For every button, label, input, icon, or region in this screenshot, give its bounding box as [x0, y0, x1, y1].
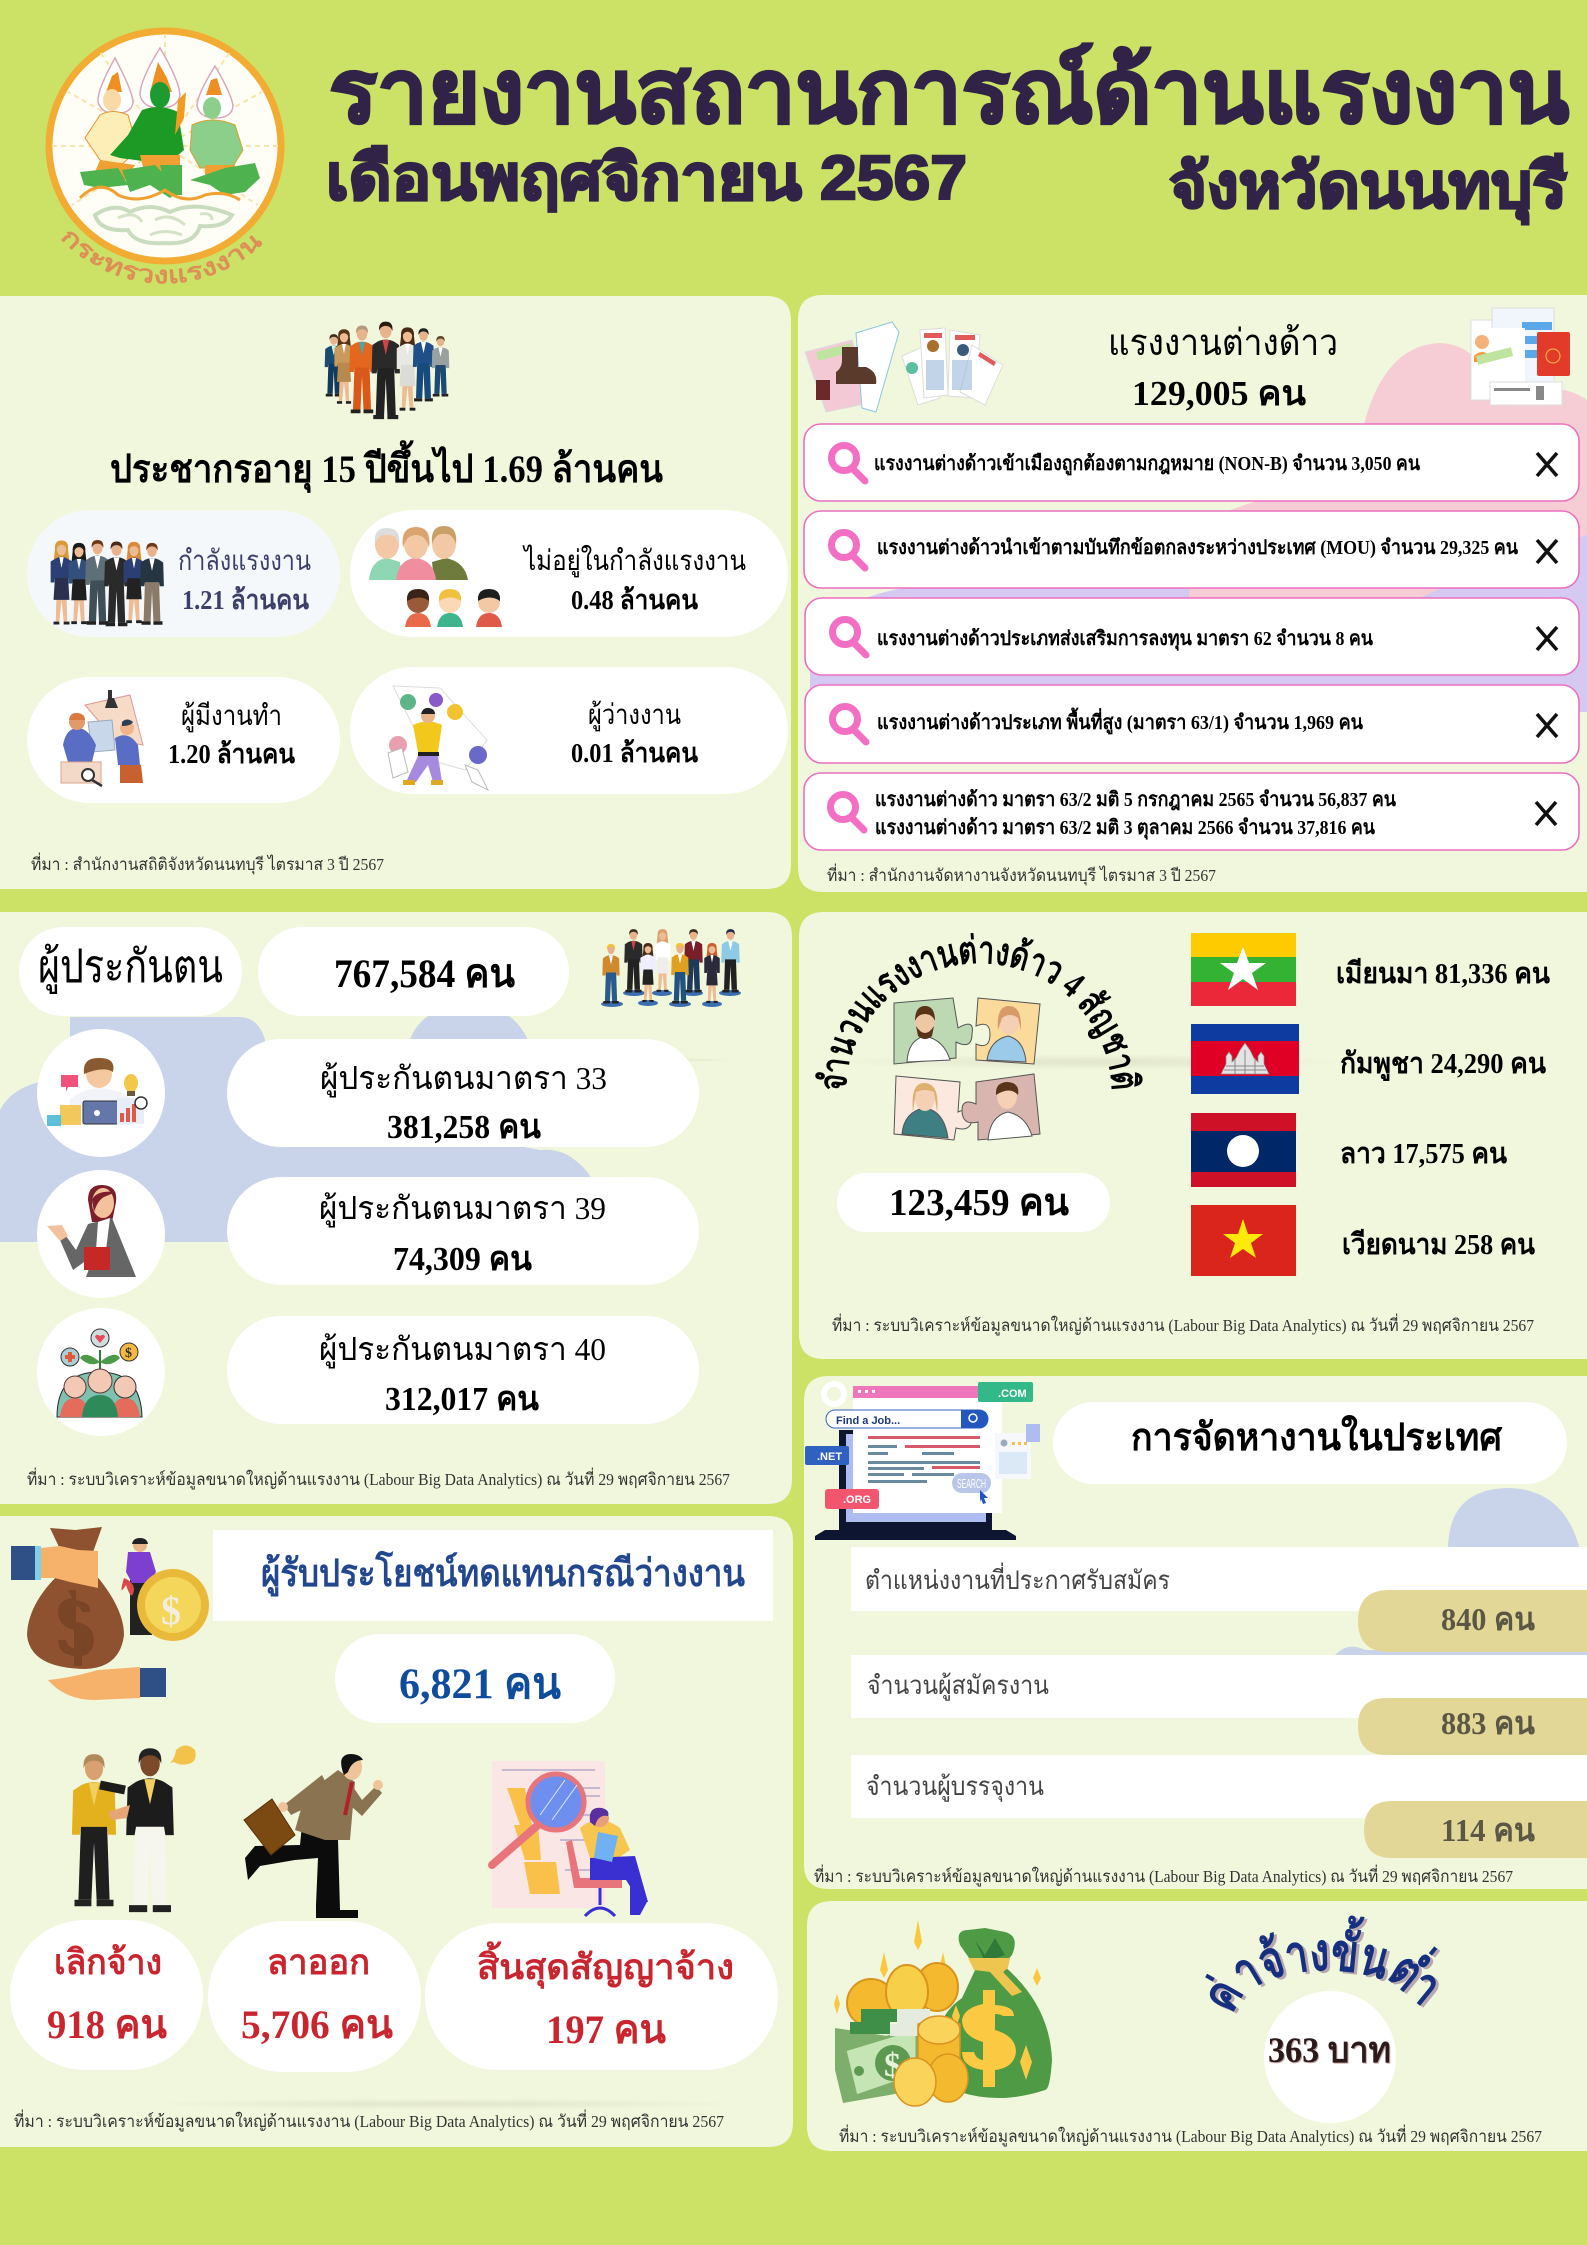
label: ผู้ประกันตนมาตรา 39 [319, 1190, 606, 1228]
text: แรงงานต่างด้าวประเภท พื้นที่สูง (มาตรา 63/1) จำนวน 1,969 คน [877, 707, 1363, 736]
icon: green money bag and coins: $ [884, 2047, 901, 2084]
heading box [213, 1530, 773, 1621]
label: Cambodia: กัมพูชา 24,290 คน [1340, 1048, 1546, 1081]
label: ไม่อยู่ในกำลังแรงงาน [522, 544, 746, 578]
row: vacancies: ตำแหน่งงานที่ประกาศรับสมัคร [865, 1562, 1170, 1595]
card: labour force [27, 510, 340, 637]
row: MOU [804, 511, 1579, 588]
source note: ที่มา : สำนักงานจัดหางานจังหวัดนนทบุรี ไตรมาส 3 ปี 2567 [827, 863, 1216, 886]
pill: heading [19, 927, 242, 1016]
subtitle province: จังหวัดนนทบุรี [1169, 152, 1567, 224]
icon: social security group [37, 1308, 165, 1436]
text line 1: แรงงานต่างด้าว มาตรา 63/2 มติ 5 กรกฎาคม 2565 จำนวน 56,837 คน [875, 788, 1396, 811]
value: 1.21 ล้านคน [182, 585, 309, 615]
value: 381,258 คน [387, 1109, 541, 1146]
card: resigned: ลาออก [267, 1943, 370, 1982]
icon: magnifier [832, 532, 865, 568]
row: section 40 [37, 1308, 699, 1436]
person with coin: $ [161, 1588, 181, 1633]
icon: seniors and children [369, 526, 502, 627]
pill: heading: การจัดหางานในประเทศ [1131, 1415, 1503, 1459]
value circle [1264, 1991, 1396, 2123]
row: applicants [851, 1655, 1587, 1755]
text: แรงงานต่างด้าวนำเข้าตามบันทึกข้อตกลงระหว่างประเทศ (MOU) จำนวน 29,325 คน [877, 536, 1518, 559]
heading: ประชากรอายุ 15 ปีขึ้นไป 1.69 ล้านคน [110, 440, 663, 493]
row: vacancies [851, 1547, 1587, 1652]
icon: approved documents and stamp [805, 322, 1003, 412]
value circle: 363 บาท [1268, 2030, 1391, 2070]
row: section 39 [37, 1170, 699, 1298]
text: แรงงานต่างด้าวเข้าเมืองถูกต้องตามกฎหมาย (NON-B) จำนวน 3,050 คน [874, 452, 1420, 477]
card: terminated: เลิกจ้าง [54, 1943, 162, 1982]
value: 74,309 คน [393, 1241, 532, 1278]
row: vacancies: 840 คน [1441, 1601, 1535, 1637]
icon: labour force people [51, 540, 164, 626]
source note: ที่มา : สำนักงานสถิติจังหวัดนนทบุรี ไตรมาส 3 ปี 2567 [31, 852, 384, 875]
pill: heading: ผู้ประกันตน [38, 941, 223, 994]
row: placements: จำนวนผู้บรรจุงาน [866, 1772, 1044, 1802]
icon: running man [244, 1754, 383, 1918]
pill: total [837, 1173, 1110, 1232]
icon: magnifier [832, 620, 866, 655]
icon: magnifier [832, 446, 865, 481]
pill: heading [1053, 1402, 1567, 1484]
icon: magnifier [830, 794, 864, 830]
arched heading: จำนวนแรงงานต่างด้าว 4 สัญชาติ [815, 933, 1143, 1090]
icon: group of workers [325, 322, 449, 419]
icon: social security group: $ [125, 1346, 132, 1361]
source note: ที่มา : ระบบวิเคราะห์ข้อมูลขนาดใหญ่ด้านแรงงาน (Labour Big Data Analytics) ณ วันที่ 29 พฤศจิกายน 2567 [839, 2124, 1542, 2147]
value: 312,017 คน [385, 1381, 539, 1418]
icon: job seeker with resumes [388, 686, 488, 790]
label: ผู้ประกันตนมาตรา 33 [320, 1060, 607, 1098]
icon: office worker [37, 1029, 165, 1157]
row: highland [805, 685, 1579, 763]
pill: total: 123,459 คน [889, 1182, 1069, 1224]
flag: Cambodia [1191, 1024, 1299, 1094]
row: NON-B [804, 424, 1579, 501]
card: unemployed [350, 667, 788, 794]
icon: job search laptop [805, 1382, 1040, 1540]
panel: domestic job placement [804, 1376, 1587, 1889]
panel: foreign workers [798, 295, 1587, 892]
row: Section 63/2 [804, 773, 1579, 850]
icon: job search laptop: SEARCH [957, 1476, 986, 1491]
row: placements: 114 คน [1441, 1812, 1535, 1848]
pill [227, 1316, 699, 1424]
card: contract ended: 197 คน [546, 2007, 666, 2052]
card: terminated [10, 1920, 203, 2070]
source note: ที่มา : ระบบวิเคราะห์ข้อมูลขนาดใหญ่ด้านแรงงาน (Labour Big Data Analytics) ณ วันที่ 29 พฤศจิกายน 2567 [14, 2109, 724, 2132]
pill [227, 1039, 699, 1147]
icon: close [1537, 714, 1557, 737]
label: ผู้มีงานทำ [181, 700, 282, 733]
icon: analyst with magnifier [492, 1761, 648, 1916]
arched heading: ค่าจ้างขั้นต่ำ [1205, 1916, 1440, 2014]
icon: job search laptop: .ORG [843, 1494, 871, 1506]
subtitle month: เดือนพฤศจิกายน 2567 [326, 144, 967, 213]
card: terminated: 918 คน [47, 2002, 167, 2047]
icon: puzzle people [894, 998, 1040, 1140]
pill: total [335, 1634, 615, 1723]
icon: close [1537, 540, 1557, 563]
panel: unemployment benefits [0, 1516, 793, 2147]
panel: population 15+ [0, 296, 791, 889]
icon: visa and passport [1471, 308, 1570, 405]
title: แรงงานต่างด้าว [1108, 323, 1338, 364]
icon: workers with stamp [61, 690, 143, 786]
icon: money bag with hands [11, 1527, 209, 1700]
value: 0.48 ล้านคน [571, 585, 698, 615]
label: กำลังแรงงาน [178, 546, 311, 577]
icon: magnifier [832, 706, 866, 742]
row: placements [851, 1755, 1587, 1858]
icon: handshake [72, 1746, 196, 1912]
header [46, 28, 1570, 284]
label: Myanmar: เมียนมา 81,336 คน [1336, 958, 1550, 990]
flag: Myanmar [1191, 933, 1296, 1006]
row: applicants: 883 คน [1441, 1705, 1535, 1741]
row: section 33 [37, 1029, 699, 1157]
icon: close [1537, 627, 1557, 650]
icon: close [1536, 802, 1556, 825]
source note: ที่มา : ระบบวิเคราะห์ข้อมูลขนาดใหญ่ด้านแรงงาน (Labour Big Data Analytics) ณ วันที่ 29 พฤศจิกายน 2567 [27, 1467, 730, 1490]
label: Laos: ลาว 17,575 คน [1340, 1138, 1507, 1170]
card: employed [27, 677, 340, 803]
panel: insured persons [0, 912, 792, 1504]
text: แรงงานต่างด้าวประเภทส่งเสริมการลงทุน มาตรา 62 จำนวน 8 คน [877, 627, 1373, 651]
label: Vietnam: เวียดนาม 258 คน [1342, 1229, 1535, 1261]
total: 129,005 คน [1132, 374, 1306, 413]
value: 1.20 ล้านคน [168, 739, 295, 769]
label: ผู้ประกันตนมาตรา 40 [319, 1331, 606, 1369]
panel: four nationalities [799, 912, 1587, 1359]
flag: Vietnam [1191, 1205, 1296, 1276]
value: 0.01 ล้านคน [571, 738, 698, 768]
row: applicants: จำนวนผู้สมัครงาน [867, 1671, 1049, 1701]
pill: total [258, 927, 569, 1016]
icon: businesswoman [37, 1170, 165, 1298]
icon: close [1537, 453, 1557, 476]
card: outside labour force [350, 510, 788, 637]
logo caption: กระทรวงแรงงาน [61, 232, 262, 284]
pill: total: 767,584 คน [334, 951, 515, 996]
panel: minimum wage [807, 1901, 1587, 2151]
person with coin [121, 1538, 209, 1641]
icon: job search laptop: .NET [817, 1451, 842, 1463]
source note: ที่มา : ระบบวิเคราะห์ข้อมูลขนาดใหญ่ด้านแรงงาน (Labour Big Data Analytics) ณ วันที่ 29 พฤศจิกายน 2567 [832, 1313, 1534, 1336]
pill [227, 1177, 699, 1285]
icon: job search laptop: Find a Job... [836, 1415, 900, 1427]
card: contract ended [425, 1923, 778, 2070]
source note: ที่มา : ระบบวิเคราะห์ข้อมูลขนาดใหญ่ด้านแรงงาน (Labour Big Data Analytics) ณ วันที่ 29 พฤศจิกายน 2567 [814, 1864, 1513, 1887]
icon: green money bag and coins [834, 1920, 1052, 2106]
pill: total: 6,821 คน [399, 1661, 562, 1708]
title: รายงานสถานการณ์ด้านแรงงาน [329, 42, 1569, 141]
row: Section 62 [805, 598, 1579, 675]
flag: Laos [1191, 1113, 1296, 1187]
label: ผู้ว่างงาน [588, 700, 681, 732]
icon: job search laptop: .COM [998, 1388, 1027, 1400]
icon: occupations crowd [601, 929, 741, 1007]
card: resigned: 5,706 คน [241, 2002, 393, 2047]
card: resigned [208, 1921, 421, 2072]
text line 2: แรงงานต่างด้าว มาตรา 63/2 มติ 3 ตุลาคม 2566 จำนวน 37,816 คน [875, 816, 1375, 840]
card: contract ended: สิ้นสุดสัญญาจ้าง [477, 1941, 734, 1989]
heading box: ผู้รับประโยชน์ทดแทนกรณีว่างงาน [261, 1550, 745, 1597]
logo: Ministry of Labour seal [46, 28, 284, 284]
